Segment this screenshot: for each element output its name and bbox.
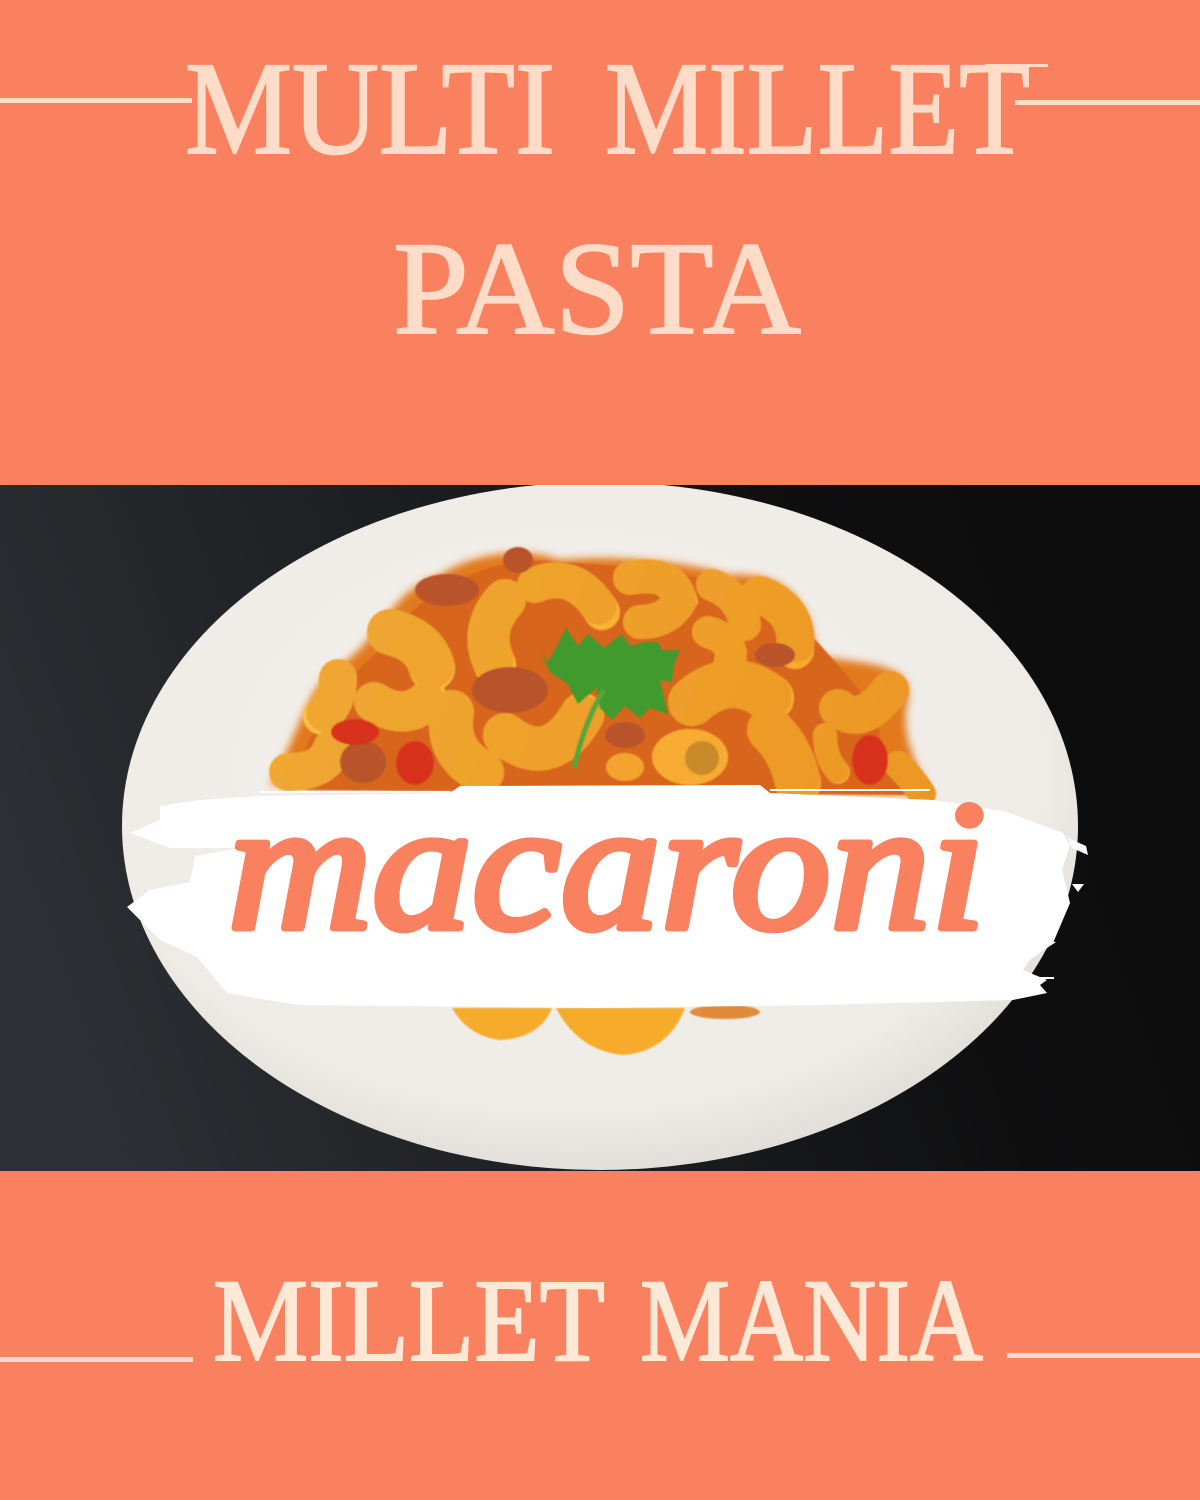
plate [122,482,1078,1170]
brand side rules [0,1353,1200,1362]
lower pasta [452,1008,552,1040]
title: PASTA [393,214,801,362]
title: MULTI [185,34,555,182]
brand name [213,1255,983,1386]
title side rules [0,64,1200,105]
brand name: MILLET [213,1255,605,1386]
brush stroke [127,785,1088,1008]
title [185,34,1030,362]
bottom banner background [0,1171,1200,1500]
pasta mound [270,547,930,1055]
icon: cilantro leaf [540,628,680,768]
meat sauce [340,547,795,783]
macaroni tube [652,729,728,785]
table background [0,485,1200,1171]
top banner background [0,0,1200,485]
brush text: macaroni: macaroni [228,764,986,969]
title: MILLET [605,34,1030,182]
tomato pieces [331,719,888,785]
food photo [0,482,1200,1171]
brand name: MANIA [640,1255,983,1386]
